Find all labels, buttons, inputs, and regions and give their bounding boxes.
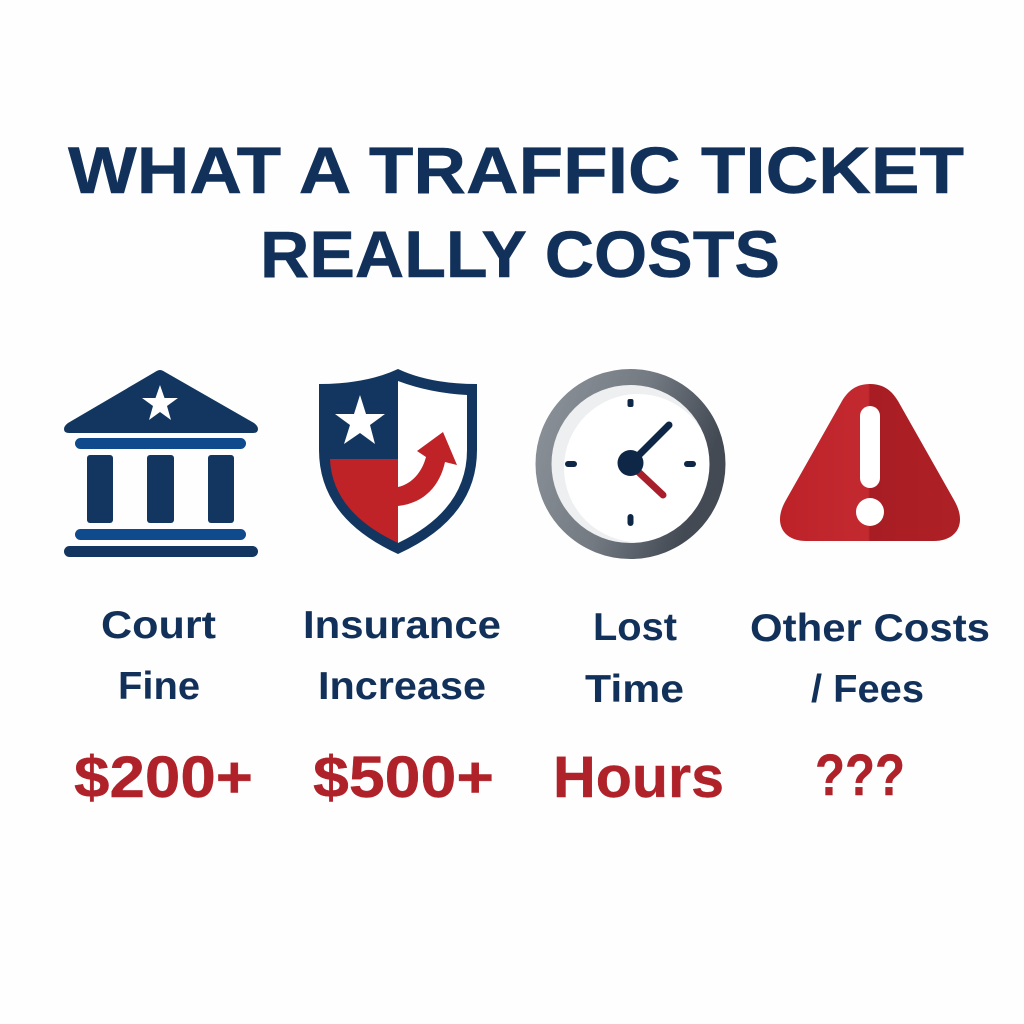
column: court fine: Court [101,604,216,647]
column: insurance increase [303,604,501,810]
column: court fine: Fine [118,665,200,708]
column: lost time: Hours [553,745,724,810]
column: insurance increase: Increase [318,665,486,708]
title [68,133,964,291]
icon: courthouse [64,370,258,557]
column: other costs: / Fees [811,668,924,711]
column: insurance increase: $500+ [313,745,494,810]
column: other costs: ??? [815,743,905,808]
icon: insurance shield [319,369,477,554]
title: WHAT A TRAFFIC TICKET [68,133,964,207]
column: lost time [553,606,724,810]
column: other costs [750,607,990,808]
column: other costs: Other Costs [750,607,990,650]
column: lost time: Lost [593,606,677,649]
column: court fine: $200+ [74,745,253,810]
column: lost time: Time [585,668,684,711]
column: insurance increase: Insurance [303,604,501,647]
icon: warning triangle [780,384,960,541]
icon: clock [544,377,718,551]
title: REALLY COSTS [260,217,780,291]
column: court fine [74,604,253,810]
